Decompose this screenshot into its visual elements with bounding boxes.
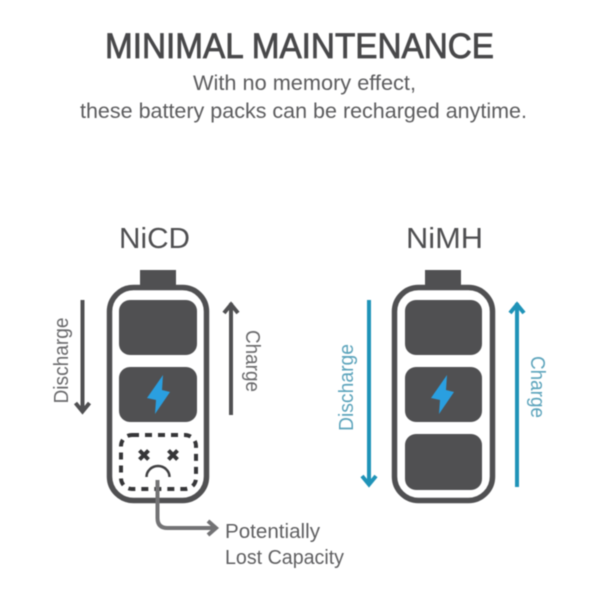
discharge arrow — [362, 300, 376, 485]
icon: NiCD battery — [110, 270, 206, 500]
callout arrow — [158, 480, 216, 535]
callout text — [225, 521, 344, 569]
panel: NiMH — [336, 223, 548, 500]
discharge arrow — [76, 300, 90, 412]
subtitle: With no memory effect, — [193, 72, 416, 95]
subtitle: these battery packs can be recharged anytime. — [80, 100, 527, 123]
panel: NiCD — [51, 223, 344, 569]
callout text: Lost Capacity — [225, 547, 344, 569]
charge label: Charge — [241, 330, 263, 392]
icon: NiMH battery — [394, 270, 492, 500]
charge arrow — [510, 303, 524, 487]
icon: lightning bolt — [147, 375, 170, 414]
NiMH label: NiMH — [406, 223, 483, 255]
icon: lightning bolt — [431, 375, 454, 414]
discharge label: Discharge — [51, 318, 73, 404]
subtitle — [80, 72, 527, 123]
title: MINIMAL MAINTENANCE — [105, 27, 494, 66]
dashed lost cell with sad face — [121, 435, 196, 489]
callout text: Potentially — [225, 521, 320, 543]
discharge label: Discharge — [336, 344, 358, 431]
charge arrow — [224, 303, 238, 415]
NiCD label: NiCD — [119, 223, 190, 255]
charge label: Charge — [526, 356, 548, 418]
